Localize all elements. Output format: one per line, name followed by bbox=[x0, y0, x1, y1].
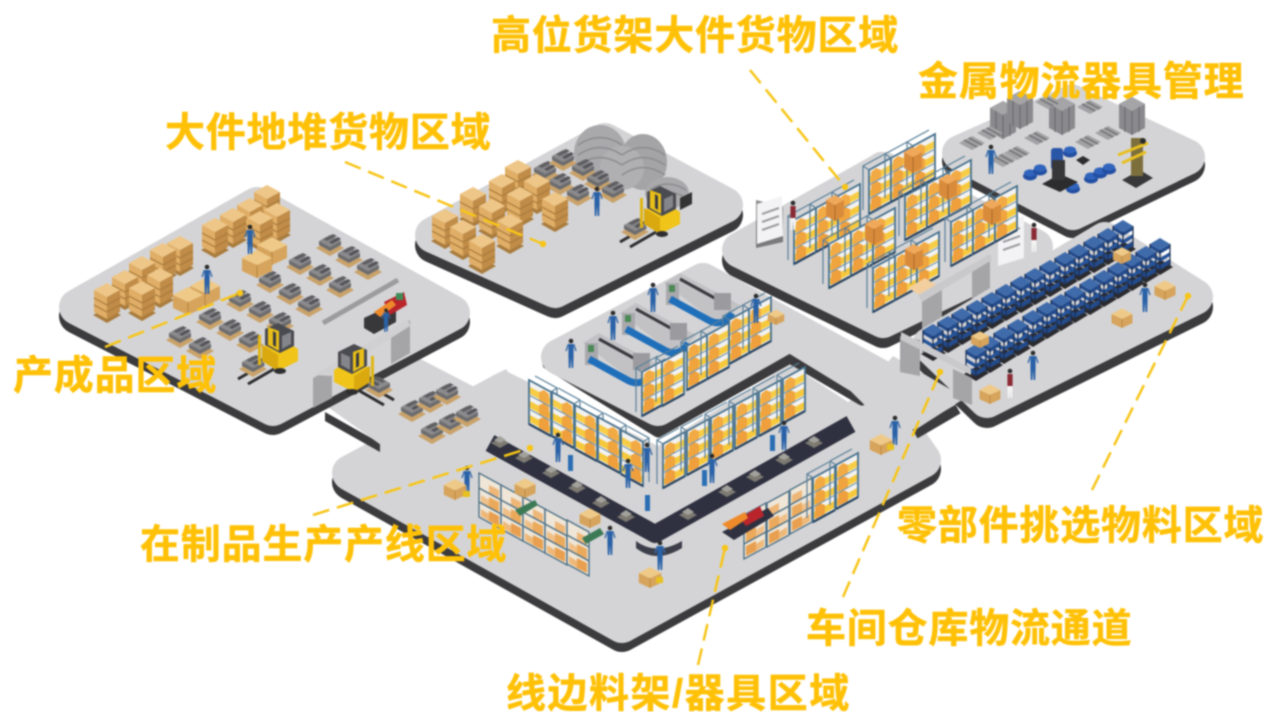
corridor to finished goods bbox=[325, 352, 490, 452]
forklift bbox=[238, 323, 298, 384]
panel: large goods floor stack platform bbox=[431, 125, 725, 300]
main floor equipment bbox=[334, 344, 900, 588]
panel: part picking platform bbox=[921, 220, 1195, 410]
shelves: lower right row bbox=[744, 449, 858, 559]
panel: conveyor stations area bbox=[548, 273, 965, 434]
shelves bbox=[636, 293, 771, 416]
shelves: upper left row bbox=[529, 376, 649, 486]
storage racks bbox=[788, 130, 1017, 312]
conveyor stations bbox=[583, 273, 740, 387]
workstation bbox=[364, 292, 407, 334]
low boxes bbox=[173, 237, 287, 315]
person bbox=[592, 187, 602, 216]
grey pallet stacks bbox=[959, 91, 1145, 167]
forklift bbox=[620, 186, 680, 247]
panel: finished goods platform bbox=[77, 185, 452, 417]
title: metal logistics equipment management: 金属物流器具管理 bbox=[918, 60, 1244, 104]
workers bbox=[566, 283, 784, 368]
blue rack row 1 bbox=[921, 220, 1136, 361]
corridor to picking platform bbox=[860, 356, 965, 434]
pallet jacks with boxes bbox=[444, 434, 894, 588]
workers bbox=[202, 225, 255, 294]
door frame bbox=[918, 254, 992, 345]
title: high shelf large goods area: 高位货架大件货物区域 bbox=[491, 14, 899, 58]
workers and crates bbox=[971, 247, 1176, 404]
title: part picking material area: 零部件挑选物料区域 bbox=[897, 504, 1264, 548]
corridor grey pallets bbox=[398, 383, 481, 444]
panel: main production floor bbox=[325, 340, 923, 634]
title: finished goods area: 产成品区域 bbox=[13, 354, 217, 398]
forklift in corridor bbox=[334, 344, 394, 405]
white cabinets bbox=[756, 196, 1024, 266]
leader lines bbox=[105, 70, 1191, 665]
workers bbox=[462, 416, 900, 570]
shelves: upper right row bbox=[657, 363, 805, 488]
white gap bbox=[490, 340, 862, 446]
grey divider bar bbox=[323, 280, 398, 323]
box stacks bbox=[431, 160, 569, 274]
tyre stacks bbox=[574, 125, 692, 210]
door frame: picking area bbox=[900, 332, 972, 405]
shelves: lower left row bbox=[479, 473, 589, 576]
grey pallets bbox=[531, 149, 627, 206]
grey pallet grid bbox=[166, 234, 382, 359]
panel: high shelf large goods platform bbox=[740, 130, 1037, 345]
door frame bbox=[313, 319, 410, 408]
lift machine bbox=[1118, 138, 1153, 188]
workers bbox=[790, 201, 1037, 252]
title: workshop warehouse logistics aisle: 车间仓库物流通道 bbox=[806, 607, 1132, 651]
pallet bbox=[908, 278, 942, 298]
green cart with boxes bbox=[514, 478, 604, 544]
box stacks bbox=[93, 185, 291, 323]
blue and black bins bbox=[1023, 146, 1116, 194]
title: WIP production line area: 在制品生产产线区域 bbox=[140, 523, 507, 567]
blue rack row 2 bbox=[964, 238, 1173, 381]
line-side workstation bbox=[722, 506, 774, 540]
panel: metal logistics equipment platform bbox=[959, 91, 1187, 220]
conveyor line bbox=[490, 424, 851, 556]
person bbox=[986, 145, 996, 174]
title: large goods floor stack area: 大件地堆货物区域 bbox=[165, 111, 491, 155]
